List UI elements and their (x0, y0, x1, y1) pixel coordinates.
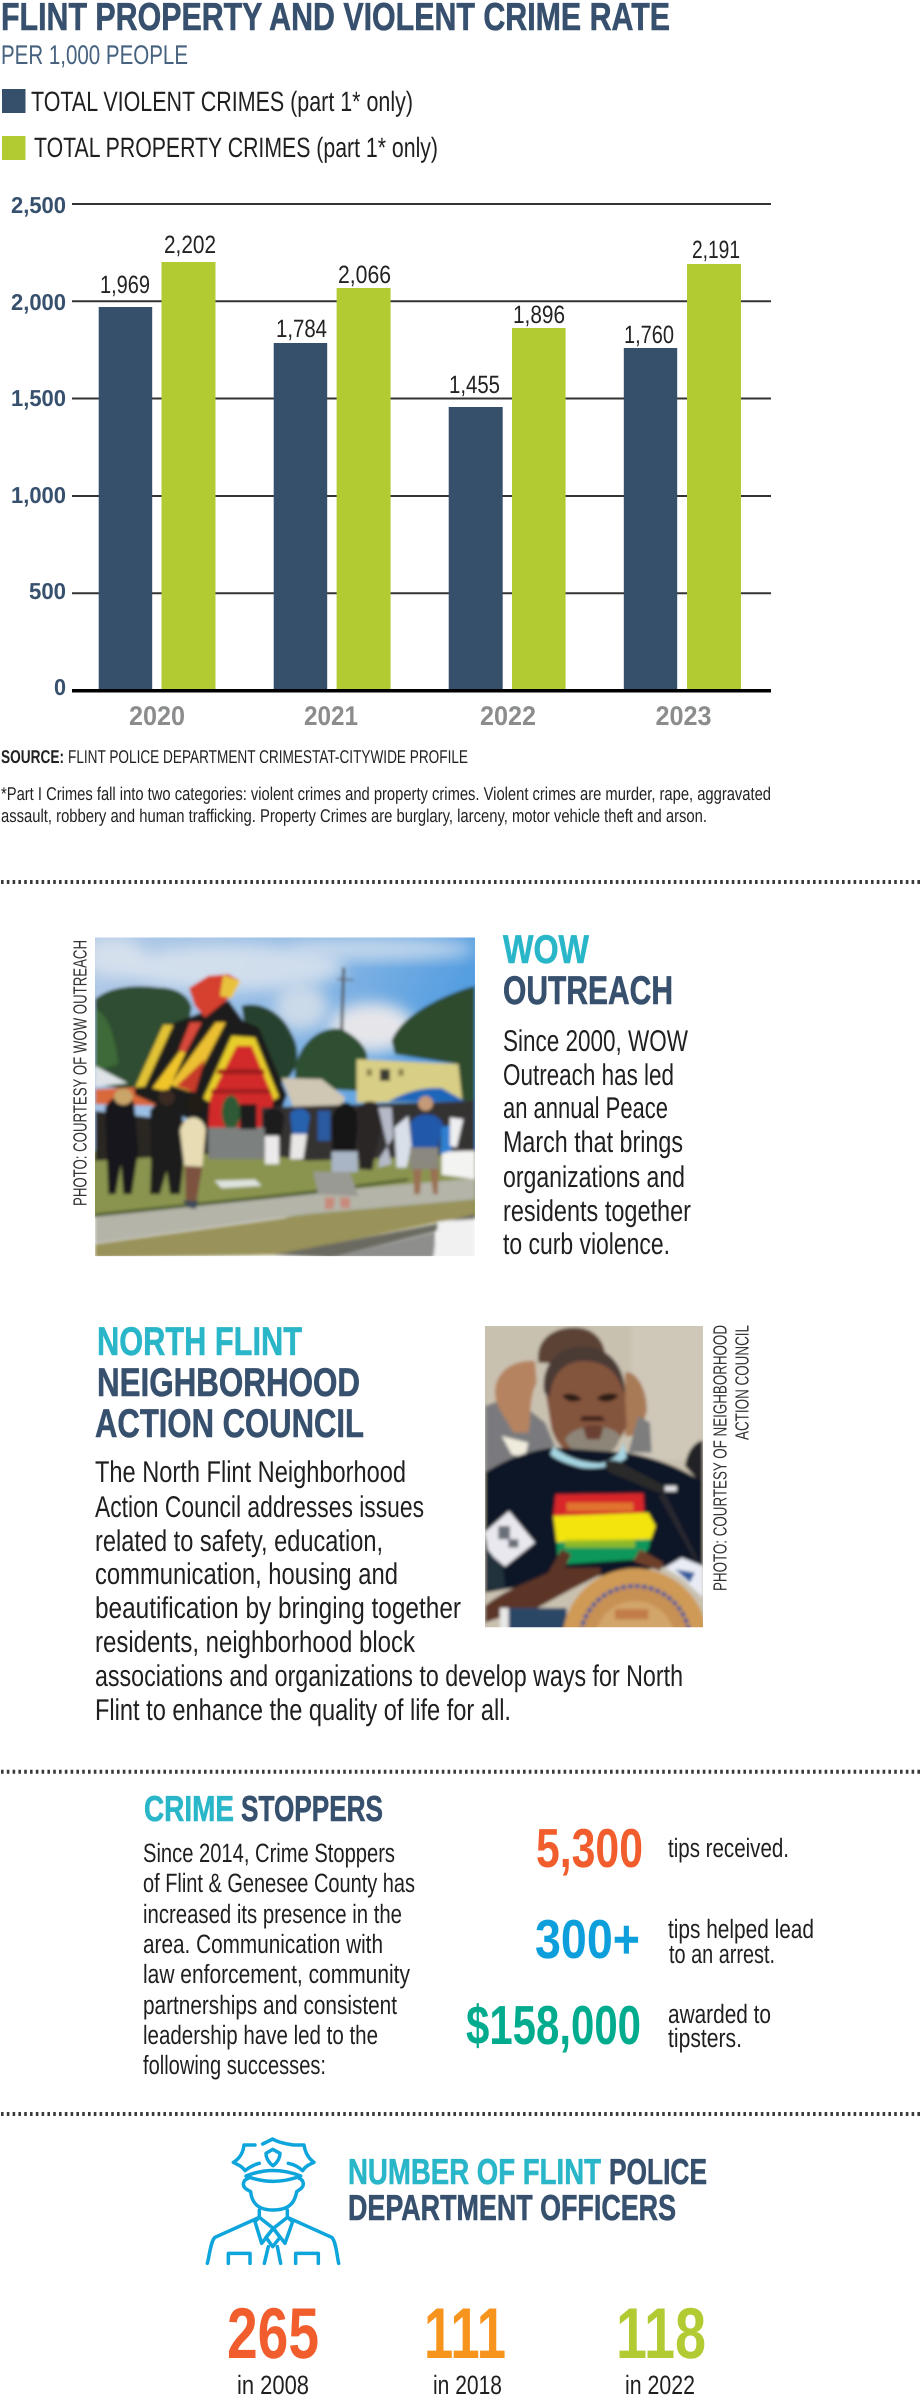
y axis labels: 1,000 (11, 482, 66, 508)
bars 2020: 2,202 (164, 231, 216, 259)
bars 2023 (624, 236, 741, 690)
footnote: assault, robbery and human trafficking. Property Crimes are burglary, larceny, motor vehicle theft and arson. (1, 805, 707, 826)
x axis year labels: 2020 (129, 701, 185, 731)
y axis labels (11, 192, 66, 700)
body text: Action Council addresses issues (95, 1491, 424, 1524)
body text: following successes: (143, 2050, 326, 2080)
x axis year labels: 2022 (480, 701, 536, 731)
bars 2022: 1,455 (449, 371, 500, 399)
photo caption: PHOTO: COURTESY OF WOW OUTREACH (70, 940, 92, 1206)
stat: 265 in 2008: in 2008 (237, 2370, 309, 2400)
y axis labels: 500 (29, 578, 66, 604)
panel: WOW Outreach (70, 928, 691, 1261)
heading: WOW Outreach: WOW (503, 928, 589, 972)
heading: CRIME (144, 1788, 234, 1829)
body text: associations and organizations to develop ways for North (95, 1660, 683, 1693)
heading: DEPARTMENT OFFICERS (348, 2187, 676, 2228)
heading: NUMBER OF FLINT (348, 2151, 601, 2192)
stat: 265 in 2008: 265 (227, 2294, 319, 2374)
body text: residents, neighborhood block (95, 1626, 416, 1659)
y axis labels: 2,000 (11, 289, 66, 315)
panel: Crime Stoppers (143, 1788, 814, 2080)
stat: awarded to tipsters: tipsters. (668, 2023, 742, 2053)
crowd (105, 1095, 138, 1194)
heading (348, 2151, 707, 2228)
source line: SOURCE: (1, 746, 64, 767)
body text: Outreach has led (503, 1059, 674, 1092)
heading: STOPPERS (241, 1788, 383, 1829)
body text: residents together (503, 1195, 691, 1228)
body text (143, 1838, 415, 2080)
stat: tips leading to arrest: 300+ (535, 1908, 640, 1970)
heading (144, 1788, 383, 1829)
body text: an annual Peace (503, 1092, 668, 1125)
stat: tips received: tips received. (668, 1833, 789, 1863)
stat: awarded to tipsters: $158,000 (466, 1994, 641, 2056)
stat: awarded to tipsters: awarded to (668, 1999, 771, 2029)
body text: beautification by bringing together (95, 1592, 461, 1625)
subtitle: PER 1,000 PEOPLE (1, 40, 188, 70)
x axis year labels (129, 701, 712, 731)
body text: communication, housing and (95, 1558, 398, 1591)
body text: law enforcement, community (143, 1959, 411, 1989)
source line: FLINT POLICE DEPARTMENT CRIMESTAT-CITYWIDE PROFILE (68, 746, 468, 767)
x axis year labels: 2021 (304, 701, 358, 731)
footnote (1, 783, 771, 826)
bars 2021: 1,784 (276, 315, 327, 343)
panel: number of Flint police officers (207, 2139, 707, 2400)
icon: police officer (207, 2139, 339, 2263)
body text: Since 2000, WOW (503, 1025, 689, 1058)
body text: Since 2014, Crime Stoppers (143, 1838, 395, 1868)
stat: tips leading to arrest (535, 1908, 814, 1970)
bars 2020: 1,969 (100, 271, 150, 299)
stat: tips leading to arrest: to an arrest. (669, 1939, 775, 1969)
heading: WOW Outreach (503, 928, 673, 1013)
bars 2021: 2,066 (338, 261, 391, 289)
stat: 118 in 2022: in 2022 (625, 2370, 695, 2400)
heading: NEIGHBORHOOD (97, 1361, 360, 1405)
photo caption (710, 1325, 754, 1591)
source line (1, 746, 468, 767)
y axis labels: 0 (54, 674, 66, 700)
bars 2023: 1,760 (624, 321, 674, 349)
photo caption: PHOTO: COURTESY OF NEIGHBORHOOD (710, 1325, 732, 1591)
body text: Flint to enhance the quality of life for all. (95, 1694, 511, 1727)
body text (503, 1025, 691, 1261)
panel: North Flint Neighborhood Action Council (95, 1319, 754, 1727)
y axis labels: 2,500 (11, 192, 66, 218)
stat: 118 in 2022 (616, 2294, 706, 2400)
photo caption: ACTION COUNCIL (732, 1325, 754, 1440)
stat: 111 in 2018: 111 (424, 2294, 506, 2374)
body text: to curb violence. (503, 1228, 670, 1261)
heading: ACTION COUNCIL (95, 1402, 364, 1446)
crowd background band (95, 1111, 208, 1161)
legend: violent crimes: TOTAL VIOLENT CRIMES (part 1* only) (31, 86, 413, 117)
x axis year labels: 2023 (656, 701, 712, 731)
photo: council speaker at podium (485, 1326, 703, 1628)
body text: area. Communication with (143, 1929, 383, 1959)
legend: property crimes: TOTAL PROPERTY CRIMES (part 1* only) (34, 132, 438, 163)
stat: 265 in 2008 (227, 2294, 319, 2400)
body text (95, 1456, 683, 1727)
body text: March that brings (503, 1126, 683, 1159)
photo: peace march with inflatable slide (85, 931, 482, 1257)
body text: leadership have led to the (143, 2020, 378, 2050)
heading: POLICE (609, 2151, 707, 2192)
body text: partnerships and consistent (143, 1990, 397, 2020)
stat: 111 in 2018 (424, 2294, 506, 2400)
stat: 111 in 2018: in 2018 (433, 2370, 502, 2400)
bars 2023: 2,191 (692, 236, 740, 264)
y axis labels: 1,500 (11, 385, 66, 411)
bar chart (11, 192, 771, 731)
body text: The North Flint Neighborhood (95, 1456, 406, 1489)
body text: of Flint & Genesee County has (143, 1868, 415, 1898)
bars 2022: 1,896 (513, 301, 565, 329)
bars 2021 (274, 261, 391, 690)
stat: tips leading to arrest: tips helped lead (668, 1914, 814, 1944)
body text: organizations and (503, 1161, 685, 1194)
bars 2022 (449, 301, 566, 690)
heading: WOW Outreach: OUTREACH (503, 969, 673, 1013)
stat: 118 in 2022: 118 (616, 2294, 706, 2374)
legend (2, 86, 438, 163)
body text: increased its presence in the (143, 1899, 402, 1929)
body text: related to safety, education, (95, 1525, 383, 1558)
bars 2020 (99, 231, 216, 690)
stat: tips received (536, 1817, 789, 1879)
stat: tips received: 5,300 (536, 1817, 643, 1879)
heading (95, 1320, 364, 1446)
heading: NORTH FLINT (97, 1320, 302, 1364)
